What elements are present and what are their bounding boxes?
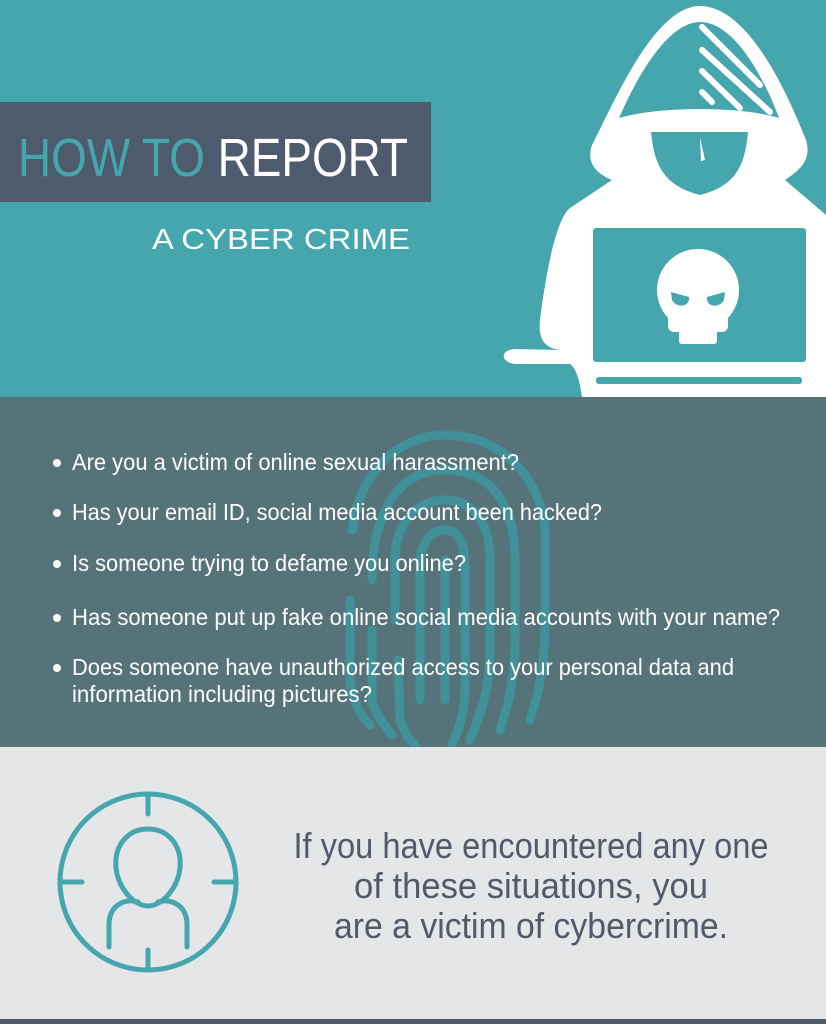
panel: conclusion: [0, 747, 826, 1019]
title box: [0, 102, 431, 202]
bullet list: information including pictures?: [72, 681, 372, 707]
conclusion text: of these situations, you: [354, 865, 708, 906]
icon: hacker: [504, 6, 826, 397]
bullet list: [53, 449, 780, 707]
bullet list: Has your email ID, social media account been hacked?: [72, 499, 602, 525]
bullet list: Does someone have unauthorized access to your personal data and: [72, 654, 734, 680]
icon: fingerprint: [350, 435, 545, 745]
title box: HOW TO REPORT: [18, 128, 408, 188]
header panel: [0, 0, 826, 397]
panel: questions: [0, 397, 826, 747]
laptop screen: [593, 228, 806, 362]
bullet list: Are you a victim of online sexual harassment?: [72, 449, 519, 475]
bullet list: Has someone put up fake online social media accounts with your name?: [72, 604, 780, 630]
skull: [657, 249, 739, 344]
conclusion text: [294, 825, 768, 946]
hood inner: [619, 22, 779, 118]
conclusion text: are a victim of cybercrime.: [334, 905, 728, 946]
conclusion text: If you have encountered any one: [294, 825, 768, 866]
icon: target person: [60, 794, 236, 970]
bullet list: Is someone trying to defame you online?: [72, 550, 466, 576]
face: [651, 132, 748, 195]
subtitle: A CYBER CRIME: [152, 224, 410, 256]
